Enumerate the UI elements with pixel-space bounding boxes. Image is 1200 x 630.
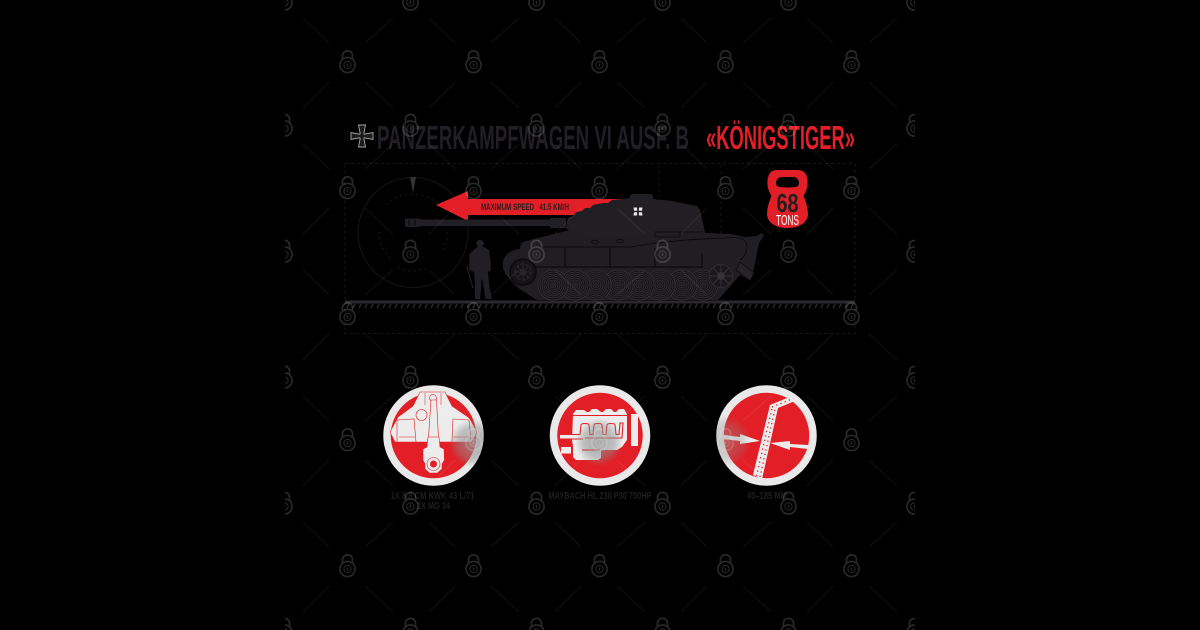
weight unit: TONS [776,212,799,229]
title: vehicle name: PANZERKAMPFWAGEN VI AUSF. B [377,119,689,156]
speed label: MAXIMUM SPEED 41.5 KM/H [481,202,569,213]
caption: engine: MAYBACH HL 230 P30 700HP [548,490,652,502]
ground line [345,300,855,308]
badge: engine [554,389,646,482]
watermark smudges on badges [450,418,748,466]
weight number: 68 [776,188,798,218]
caption: armour: 40–185 MM [747,490,787,502]
blueprint frame [345,164,855,334]
range finder reticle [358,177,468,288]
balkenkreuz marking [634,208,642,216]
rear mudguard [736,262,754,281]
tank silhouette [405,194,764,300]
icon: armour plate with arrows [723,396,808,479]
iron cross icon [351,125,373,147]
watermark pattern [285,0,915,630]
road wheels [538,270,718,300]
caption: armament: 1X 8.8 CM KWK 43 L/71 [391,490,475,502]
infographic canvas [285,0,915,630]
caption: armament: 2X MG 34 [417,500,450,512]
hull detail lines [522,232,747,268]
badge: armour [720,389,813,482]
icon: tank front view [390,392,477,473]
rear idler [710,264,732,288]
red speed arrow [436,191,630,221]
badge: armament [387,389,480,482]
gun barrel [405,218,566,228]
soldier silhouette [466,240,492,299]
title: nickname: «KÖNIGSTIGER» [706,119,855,156]
drive sprocket [510,259,536,285]
hull [503,230,764,300]
turret [566,194,706,238]
weight kettlebell [767,170,808,229]
icon: engine [560,409,638,460]
